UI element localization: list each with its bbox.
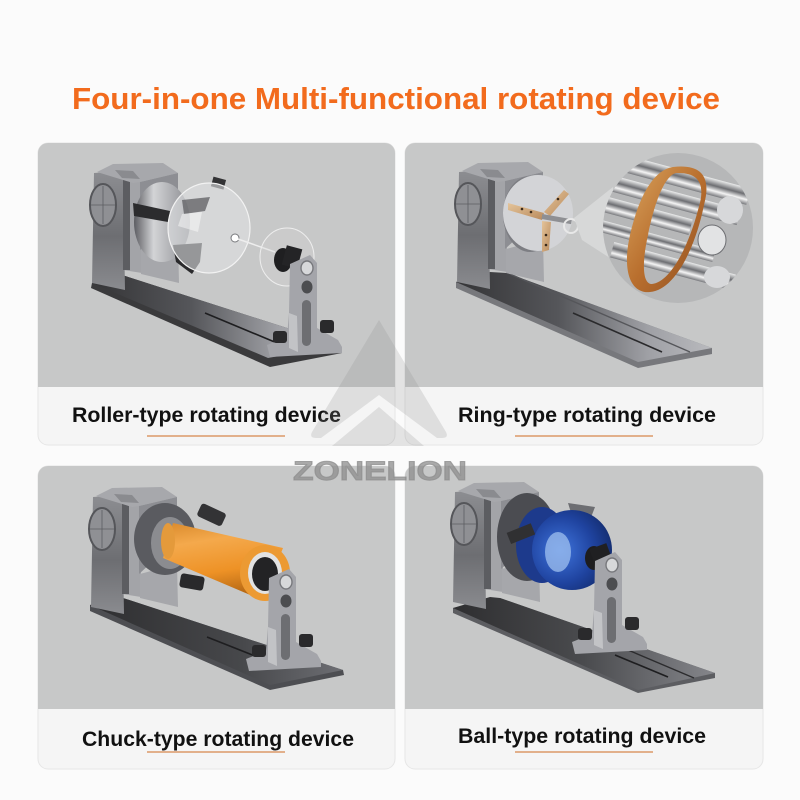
device: ring rotary — [455, 162, 712, 368]
watermark: ZONELION logo — [293, 320, 467, 486]
image background — [405, 143, 763, 387]
underline — [515, 435, 653, 437]
underline — [515, 751, 653, 753]
panel card — [405, 143, 763, 445]
panel: chuck-type — [38, 466, 395, 769]
callout beam — [574, 187, 613, 260]
image background — [405, 466, 763, 709]
panel: roller-type — [38, 143, 395, 445]
device: roller rotary — [90, 163, 342, 367]
underline — [147, 751, 285, 753]
panel card — [405, 466, 763, 769]
panel card — [38, 143, 395, 445]
callout: ring close-up — [603, 153, 753, 303]
label: Chuck-type rotating device — [82, 728, 354, 751]
image background — [38, 143, 395, 387]
label: Ball-type rotating device — [458, 725, 706, 748]
device: chuck rotary — [89, 487, 344, 690]
device: ball rotary — [451, 482, 715, 693]
title: Four-in-one Multi-functional rotating device — [72, 81, 720, 116]
panel card — [38, 466, 395, 769]
panel: ring-type — [405, 143, 763, 445]
underline — [147, 435, 285, 437]
panel: ball-type — [405, 466, 763, 769]
label: Roller-type rotating device — [72, 404, 341, 427]
label: Ring-type rotating device — [458, 404, 716, 427]
image background — [38, 466, 395, 709]
watermark: ZONELION logo: ZONELION — [293, 456, 467, 486]
